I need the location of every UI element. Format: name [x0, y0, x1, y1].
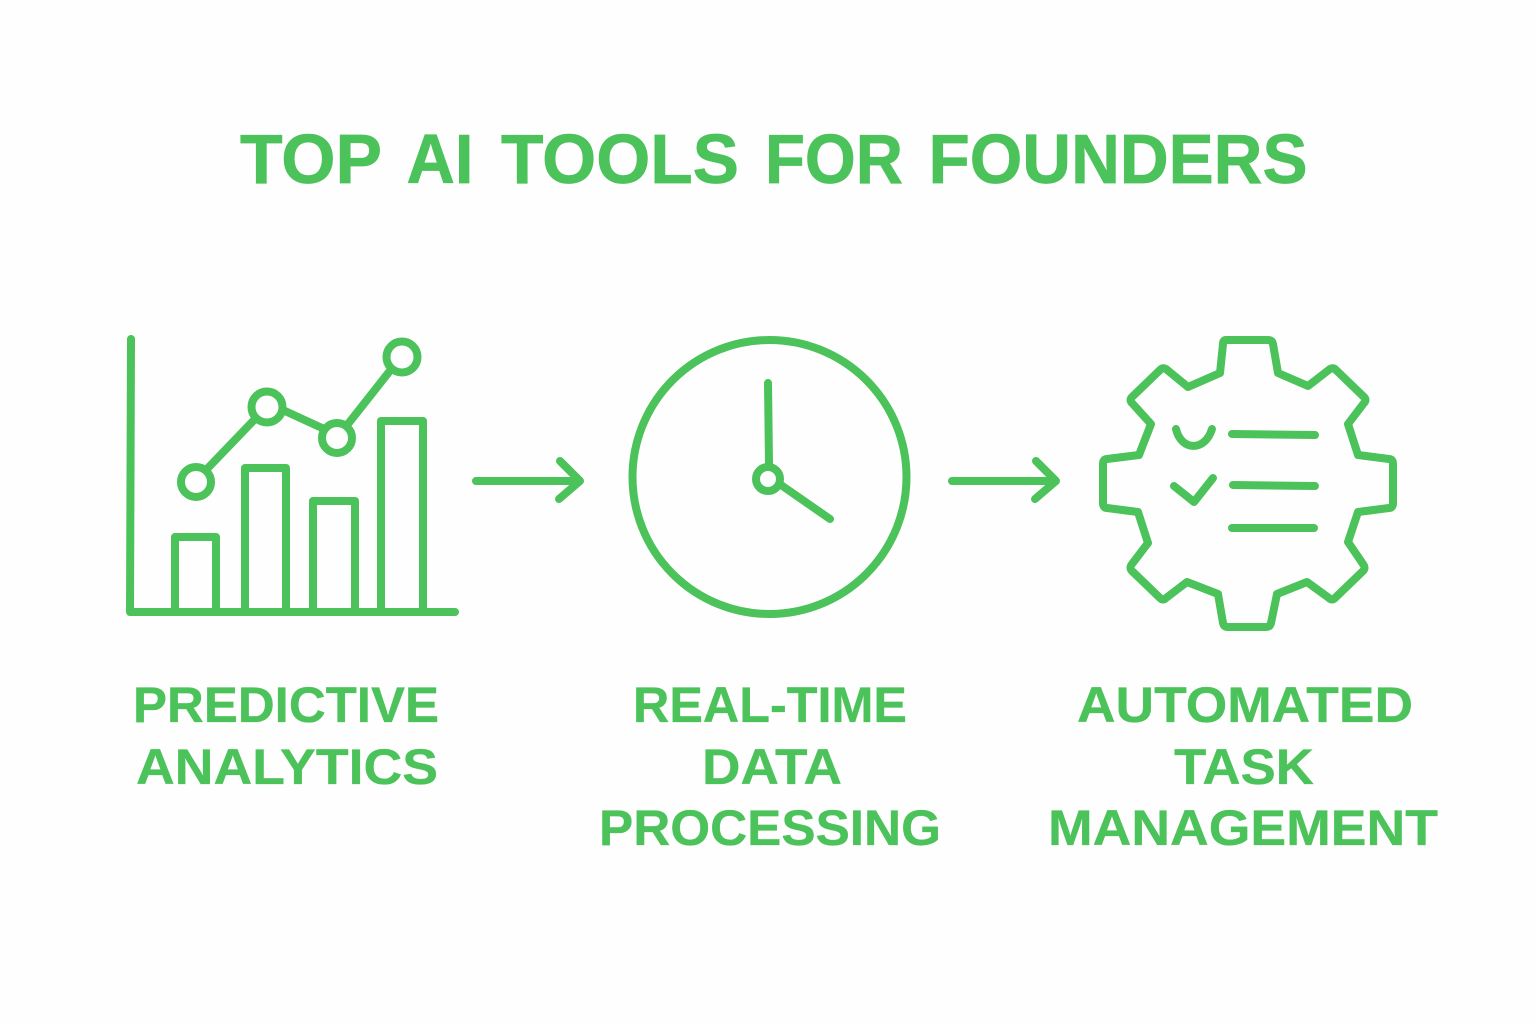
label: automated task management: MANAGEMENT [1048, 800, 1438, 856]
label: automated task management: AUTOMATED [1077, 677, 1413, 733]
icon: gear with checklist [1103, 340, 1393, 627]
label: predictive analytics [133, 677, 439, 795]
label: automated task management [1048, 677, 1438, 856]
label: real-time data processing: PROCESSING [599, 800, 941, 856]
title: FOUNDERS [928, 120, 1308, 198]
label: real-time data processing [599, 677, 941, 856]
icon: clock [632, 340, 906, 614]
label: automated task management: TASK [1174, 739, 1314, 795]
title: FOR [765, 120, 903, 198]
arrow: data processing to task management [952, 461, 1056, 499]
arrow: analytics to data processing [476, 461, 580, 499]
label: real-time data processing: REAL-TIME [633, 677, 907, 733]
title: TOOLS [501, 120, 739, 198]
title [240, 120, 1308, 198]
label: predictive analytics: ANALYTICS [136, 739, 438, 795]
label: predictive analytics: PREDICTIVE [133, 677, 439, 733]
title: TOP [240, 120, 382, 198]
title: AI [406, 120, 474, 198]
label: real-time data processing: DATA [702, 739, 842, 795]
icon: analytics chart [130, 339, 455, 612]
